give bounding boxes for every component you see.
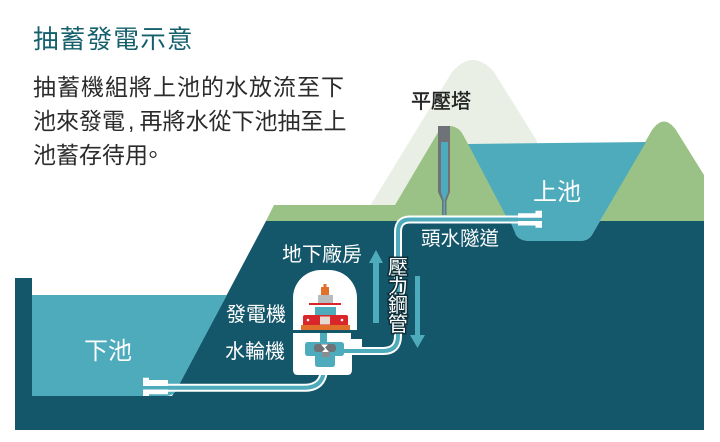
upper reservoir	[468, 142, 646, 241]
label: upper reservoir: 上池	[533, 179, 581, 206]
description text: 再將水從下池抽至上	[140, 108, 346, 134]
label: surge tower: 平壓塔	[411, 90, 471, 113]
lower outlet	[143, 378, 168, 396]
label: headrace tunnel: 頭水隧道	[421, 228, 499, 250]
label: lower reservoir: 下池	[84, 338, 132, 365]
description text	[33, 74, 346, 168]
pipe into turbine	[340, 349, 352, 353]
description text: 池蓄存待用	[33, 142, 148, 168]
background mountain	[370, 60, 537, 206]
upper intake	[518, 211, 542, 228]
turbine	[305, 333, 344, 367]
generator	[301, 284, 350, 330]
label: penstock	[388, 257, 408, 336]
label: turbine: 水輪機	[225, 340, 285, 363]
arrow: up	[369, 250, 383, 323]
ground	[15, 221, 704, 430]
label: penstock: 鋼	[388, 294, 408, 317]
label: underground powerhouse: 地下廠房	[282, 242, 362, 266]
description text: 抽蓄機組將上池的水放流至下	[33, 74, 345, 100]
description text: ,	[128, 108, 134, 134]
description text: 池來發電	[33, 108, 125, 134]
label: generator: 發電機	[226, 303, 286, 326]
green hills	[266, 122, 704, 221]
water tunnel pipe	[160, 220, 520, 388]
label: penstock: 壓	[388, 257, 408, 279]
arrow: down	[410, 276, 425, 348]
surge tower	[438, 126, 450, 215]
description text: 。	[142, 142, 164, 168]
title: 抽蓄發電示意	[33, 26, 194, 54]
label: penstock: 管	[388, 313, 408, 336]
lower reservoir	[32, 295, 227, 396]
label: penstock: 力	[388, 275, 408, 298]
powerhouse	[293, 270, 362, 375]
